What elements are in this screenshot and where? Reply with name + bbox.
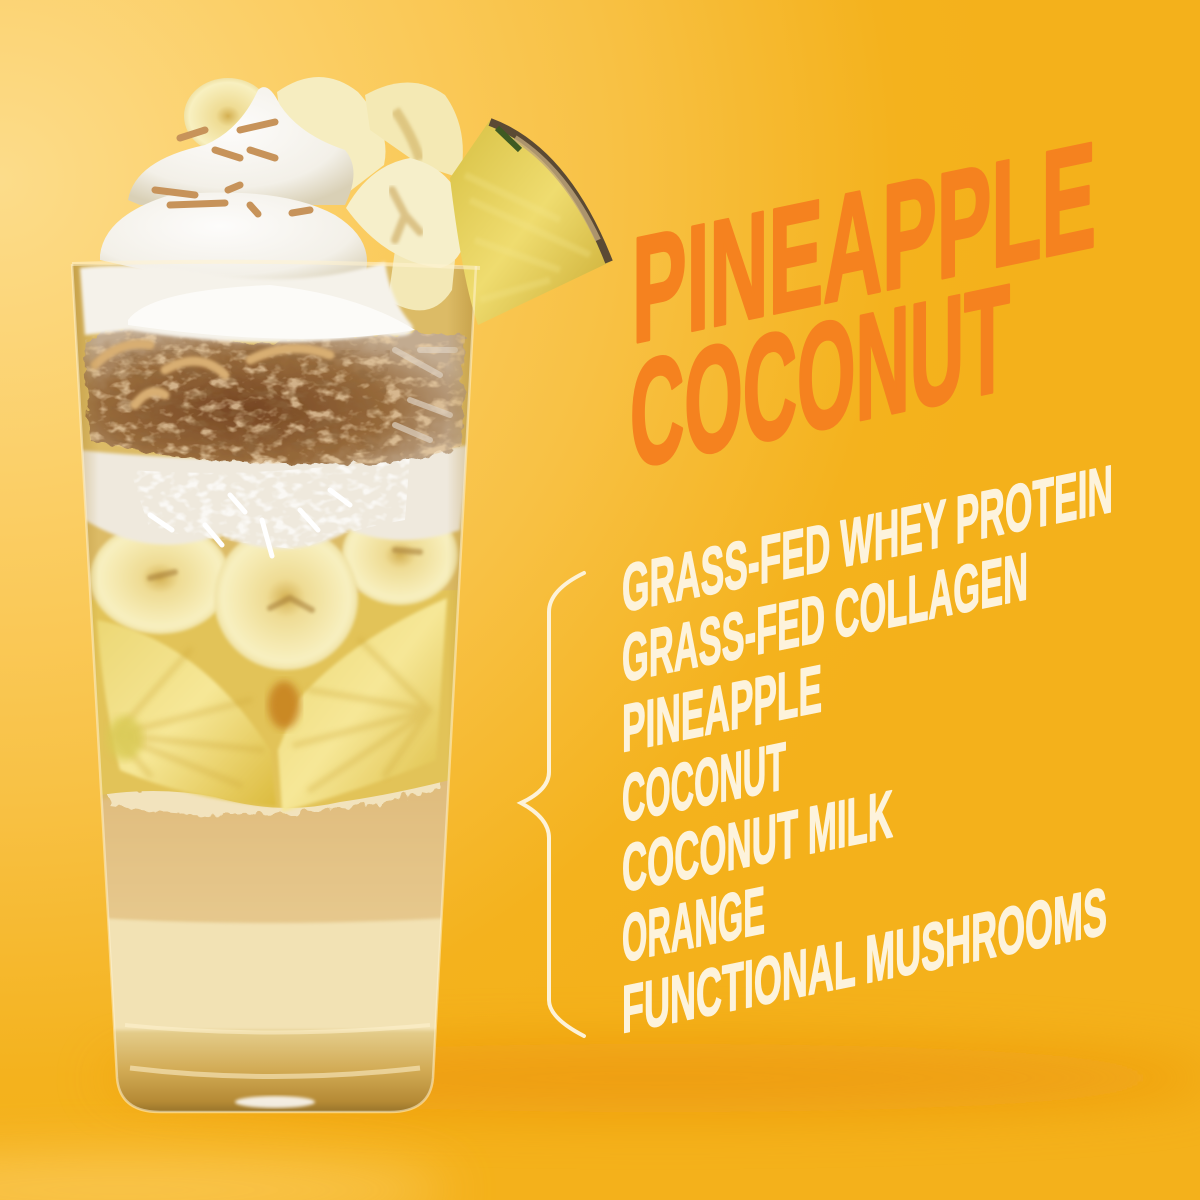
pineapple wedge garnish	[450, 120, 610, 325]
ingredient: coconut milk: COCONUT MILK	[622, 777, 893, 907]
pineapple chunks in glass	[97, 598, 447, 812]
bracket	[521, 573, 584, 1036]
glass contents	[60, 260, 490, 1120]
glass with layered smoothie	[60, 77, 610, 1120]
top banana slices	[184, 77, 467, 310]
ingredient list: ORANGE	[622, 873, 765, 977]
banana slices in glass	[90, 529, 460, 672]
white shredded coconut	[78, 445, 470, 556]
whipped cream	[80, 87, 415, 342]
toasted coconut	[85, 326, 465, 464]
title	[630, 111, 1096, 501]
ingredient: pineapple: PINEAPPLE	[622, 652, 822, 767]
ingredient list	[622, 452, 1113, 1048]
glass rim and outline	[72, 262, 480, 1112]
ingredient list: COCONUT	[622, 729, 786, 837]
